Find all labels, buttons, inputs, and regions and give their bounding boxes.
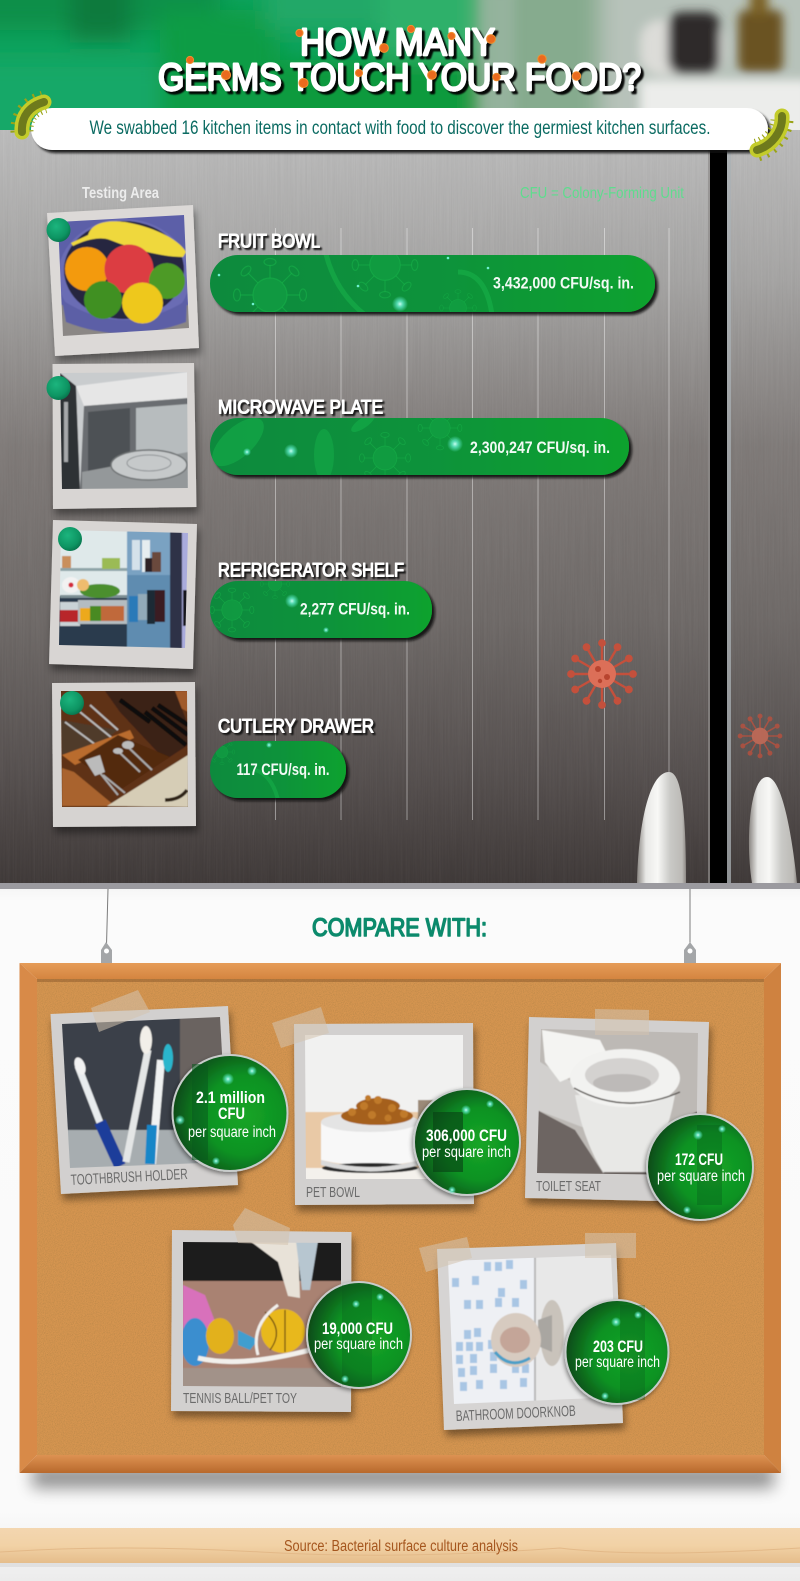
- tape: [595, 1009, 649, 1035]
- badge: pet bowl: 306,000 CFU: [426, 1126, 507, 1145]
- fridge handle left: [637, 772, 686, 883]
- fridge panel: [0, 130, 800, 889]
- badge: tennis ball / pet toy: [307, 1282, 411, 1388]
- hanging wire right: [684, 889, 696, 963]
- polaroid photo: drawer: [52, 682, 196, 827]
- badge: toothbrush holder: 2.1 million: [196, 1088, 265, 1107]
- fridge handle right: [749, 777, 797, 883]
- bar: refrigerator shelf: 2,277 CFU/sq. in.: [300, 600, 410, 618]
- icon: large red virus: [568, 640, 636, 708]
- badge: toilet seat: [647, 1114, 753, 1220]
- card: pet bowl: PET BOWL: [306, 1184, 360, 1201]
- label: fruit bowl: FRUIT BOWL: [218, 232, 320, 252]
- badge: pet bowl: [414, 1089, 520, 1195]
- bar: cutlery drawer: [209, 739, 346, 800]
- badge: pet bowl: per square inch: [422, 1144, 511, 1161]
- wall background: [0, 880, 800, 1581]
- card: bathroom doorknob: BATHROOM DOORKNOB: [455, 1403, 576, 1425]
- title: [158, 22, 641, 99]
- row: refrigerator shelf: [49, 520, 432, 669]
- board shadow: [32, 1466, 774, 1488]
- tape: [272, 1007, 329, 1048]
- card: toothbrush holder: TOOTHBRUSH HOLDER: [70, 1166, 188, 1189]
- label: microwave plate: MICROWAVE PLATE: [218, 398, 383, 418]
- row: cutlery drawer: [52, 682, 374, 827]
- badge: toilet seat: 172 CFU: [675, 1150, 723, 1169]
- title: HOW MANY: [300, 22, 495, 64]
- card: pet bowl: [294, 1023, 474, 1205]
- cork board: [20, 963, 781, 1473]
- card: toothbrush holder: [50, 1006, 238, 1194]
- bar: fruit bowl: [210, 255, 660, 317]
- card: bathroom doorknob: [437, 1243, 624, 1430]
- row: microwave plate: [46, 363, 629, 509]
- title: GERMS TOUCH YOUR FOOD?: [158, 57, 641, 99]
- icon: bacterium left: [22, 102, 44, 132]
- badge: toilet seat: per square inch: [657, 1168, 745, 1185]
- badge: bathroom doorknob: 203 CFU: [593, 1337, 643, 1356]
- polaroid photo: microwave: [52, 363, 196, 509]
- badge: toothbrush holder: [172, 1055, 288, 1171]
- subtitle banner: [31, 108, 768, 150]
- bar: refrigerator shelf: [210, 569, 432, 638]
- card: tennis ball / pet toy: TENNIS BALL/PET TOY: [183, 1390, 297, 1407]
- hanging wire left: [101, 889, 112, 963]
- pin: [46, 376, 70, 400]
- tape: [585, 1233, 636, 1258]
- CFU legend: CFU = Colony-Forming Unit: [520, 185, 685, 202]
- label: cutlery drawer: CUTLERY DRAWER: [218, 716, 374, 738]
- wooden ruler with source: [0, 1528, 800, 1567]
- badge: toothbrush holder: per square inch: [188, 1124, 276, 1141]
- card: toilet seat: [525, 1017, 709, 1202]
- heading: compare with: COMPARE WITH:: [312, 914, 487, 942]
- bar: fruit bowl: 3,432,000 CFU/sq. in.: [493, 274, 634, 292]
- blurred kitchen header photo: [0, 0, 800, 130]
- chart grid lines: [276, 228, 669, 820]
- card: tennis ball / pet toy: [171, 1230, 352, 1412]
- badge: toothbrush holder: CFU: [218, 1104, 245, 1123]
- tape: [419, 1237, 472, 1272]
- pin: [60, 691, 84, 715]
- pin: [58, 527, 82, 551]
- tape: [233, 1208, 290, 1245]
- bar: cutlery drawer: 117 CFU/sq. in.: [236, 761, 330, 779]
- badge: tennis ball / pet toy: 19,000 CFU: [322, 1319, 393, 1338]
- badge: bathroom doorknob: [566, 1300, 668, 1404]
- pin: [46, 218, 70, 242]
- badge: bathroom doorknob: per square inch: [575, 1354, 660, 1371]
- tape: [91, 990, 150, 1032]
- label: refrigerator shelf: REFRIGERATOR SHELF: [218, 560, 404, 582]
- wooden ruler with source: Source: Bacterial surface culture analysis: [284, 1538, 518, 1555]
- icon: bacterium right: [757, 116, 782, 150]
- row: fruit bowl: [46, 205, 655, 356]
- polaroid photo: fridge: [49, 520, 197, 669]
- polaroid photo: fruit bowl: [47, 205, 199, 356]
- badge: tennis ball / pet toy: per square inch: [314, 1336, 403, 1353]
- testing area label: Testing Area: [82, 185, 159, 202]
- bar: microwave plate: [210, 418, 634, 480]
- icon: small red virus: [738, 714, 782, 758]
- bar: microwave plate: 2,300,247 CFU/sq. in.: [470, 439, 610, 457]
- card: toilet seat: TOILET SEAT: [536, 1178, 601, 1195]
